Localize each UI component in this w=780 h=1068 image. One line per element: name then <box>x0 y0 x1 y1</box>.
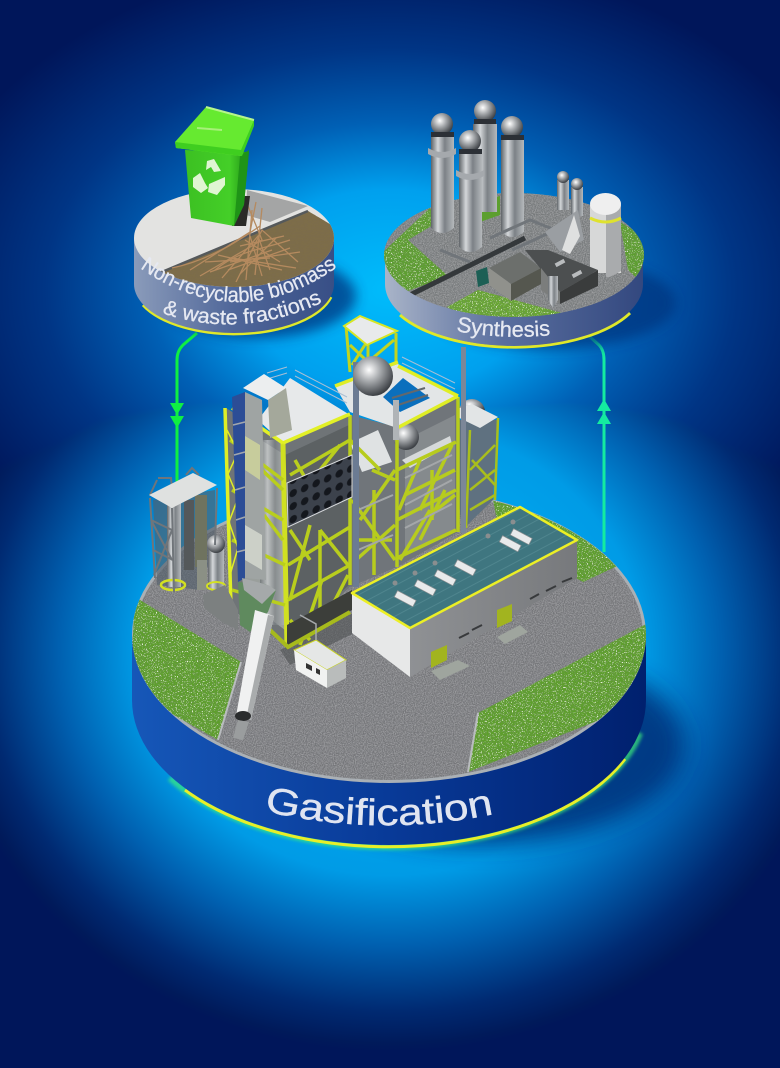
piping <box>440 220 560 262</box>
disk top <box>384 193 644 317</box>
grass: right <box>621 222 644 277</box>
label: gasification <box>268 788 492 826</box>
pavement shade <box>246 190 308 222</box>
feed chute <box>233 610 274 740</box>
building two <box>525 250 598 292</box>
columns <box>167 502 181 587</box>
deck opening <box>383 378 430 412</box>
disk shadow <box>160 254 356 338</box>
disk shadow <box>424 257 676 349</box>
silver columns <box>428 100 524 252</box>
bin body <box>185 150 249 226</box>
grass: left lawn <box>130 597 241 740</box>
label: non-recyclable biomass <box>141 257 336 325</box>
small utility building <box>294 615 346 688</box>
dome two <box>393 424 419 450</box>
label: synthesis: Synthesis <box>457 317 550 338</box>
grass: back lawn <box>493 500 616 582</box>
storage tank <box>590 193 621 277</box>
bin lid <box>175 107 254 156</box>
yellow frame <box>335 362 458 575</box>
yellow rim <box>143 297 331 334</box>
road <box>408 238 525 296</box>
scaffold <box>150 468 217 592</box>
small scrubber tower <box>149 468 238 630</box>
backing <box>153 490 215 590</box>
small vessels <box>545 171 584 252</box>
panel: gasification disk <box>132 314 696 862</box>
disk side <box>385 255 643 346</box>
pipes <box>353 362 359 587</box>
recycle symbol <box>193 159 225 195</box>
label: non-recyclable biomass: Non-recyclable biomass <box>141 257 336 303</box>
top deck <box>344 316 397 345</box>
building one <box>489 252 541 284</box>
doors <box>431 645 447 668</box>
column front <box>459 152 482 252</box>
sphere <box>353 356 393 396</box>
icon: recycling bin <box>175 107 254 226</box>
vent units <box>555 259 582 278</box>
arrowheads up <box>597 399 611 424</box>
tower body <box>226 408 350 645</box>
bin side <box>234 150 249 226</box>
label: gasification: Gasification <box>268 788 492 826</box>
panel: synthesis disk <box>384 100 678 356</box>
frame yellow <box>225 408 350 647</box>
inner vessel <box>245 430 285 630</box>
disk side <box>132 635 646 845</box>
yellow collars <box>161 580 185 590</box>
base equipment <box>203 585 238 630</box>
upper duct box <box>243 374 286 400</box>
wall slots <box>459 578 572 638</box>
vessel <box>208 545 224 590</box>
loading pads <box>431 660 470 680</box>
left tower <box>225 374 352 647</box>
deck two <box>350 430 392 472</box>
column right <box>501 138 524 237</box>
walkways <box>358 455 452 550</box>
grey hopper head <box>242 578 276 604</box>
cyclone <box>548 276 558 308</box>
left wall <box>352 593 410 677</box>
pad under tower <box>280 612 370 665</box>
arrowheads down <box>170 403 184 428</box>
mulch surface <box>160 210 334 287</box>
roof vents <box>394 529 532 607</box>
grass: right lawn <box>468 622 650 772</box>
panel: biomass disk <box>134 106 363 346</box>
tower footing <box>287 590 352 647</box>
grass: left <box>380 208 448 292</box>
handrails <box>267 357 455 403</box>
label: non-recyclable biomass: & waste fractions <box>164 294 321 325</box>
bin shadow <box>232 196 250 226</box>
yellow rim <box>400 313 630 347</box>
roof caps <box>392 520 516 586</box>
frame <box>466 418 498 528</box>
lawn kerb <box>218 662 478 772</box>
grass: back <box>482 196 500 222</box>
truck <box>476 267 489 287</box>
interior <box>350 397 458 587</box>
filter panel <box>287 455 352 527</box>
concrete top <box>134 189 334 287</box>
connector arrow: biomass to gasification <box>170 333 197 490</box>
buildings and truck <box>476 215 598 308</box>
right wall <box>410 540 577 677</box>
column back <box>473 124 497 212</box>
warehouse <box>352 507 577 680</box>
disk side <box>134 238 334 333</box>
duct column <box>232 392 245 582</box>
grass: front <box>447 290 562 317</box>
middle structure <box>267 347 466 587</box>
disk edge <box>132 487 646 783</box>
connector arrow: gasification to synthesis <box>589 336 611 552</box>
right tower with dome <box>447 399 498 530</box>
green hopper <box>238 582 276 632</box>
dome <box>459 399 485 414</box>
roof <box>352 507 577 628</box>
top deck <box>335 364 458 428</box>
top scaffold <box>344 316 397 372</box>
green glow <box>170 733 640 847</box>
column left <box>431 134 454 233</box>
platform <box>258 378 350 443</box>
deck <box>447 404 498 428</box>
root pile <box>172 202 300 282</box>
left frame lattice <box>227 430 238 575</box>
gravel top <box>135 490 643 780</box>
deck <box>149 473 217 508</box>
yellow rim <box>185 759 625 847</box>
disk shadow <box>275 645 685 845</box>
